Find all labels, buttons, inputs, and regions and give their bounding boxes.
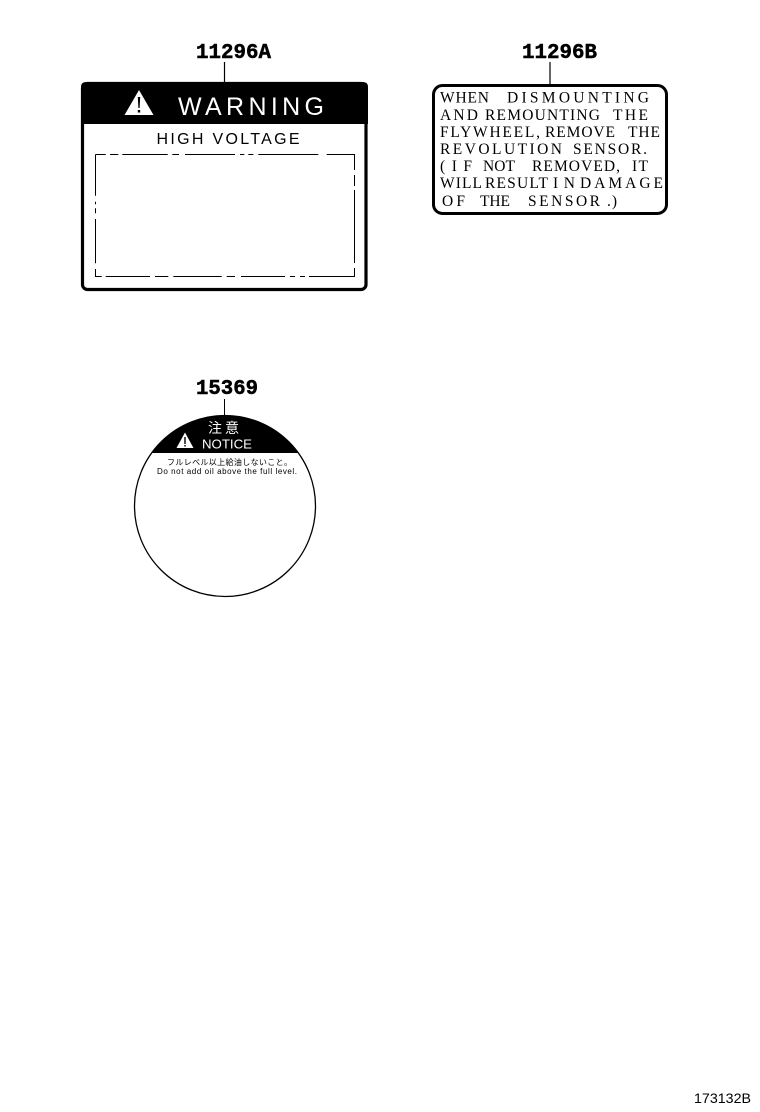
leader line C xyxy=(224,399,226,416)
notice japanese heading: 注意 xyxy=(208,420,239,436)
panel: label 11296A xyxy=(81,42,368,290)
caution text block: SENSOR xyxy=(528,193,601,210)
caution text block: NOT xyxy=(483,158,516,175)
high voltage heading: HIGH VOLTAGE xyxy=(156,131,300,148)
caution label frame xyxy=(434,86,666,214)
part number 15369: 15369 xyxy=(196,378,258,401)
leader line A xyxy=(224,62,226,84)
notice japanese text: フルレベル以上給油しないこと。 xyxy=(167,457,292,467)
caution text block: WHEN xyxy=(440,90,489,106)
part number 11296B: 11296B xyxy=(522,42,597,65)
notice circle outline xyxy=(134,416,316,596)
notice heading: NOTICE xyxy=(202,436,252,452)
caution text block: (IF xyxy=(440,158,472,175)
caution text block: .) xyxy=(607,193,617,210)
warning black header xyxy=(81,82,368,124)
caution text block: THE xyxy=(628,124,660,141)
caution text block: REMOUNTING xyxy=(485,107,600,124)
caution text block: REMOVED, xyxy=(532,158,620,175)
caution text block: OF xyxy=(442,193,465,210)
figure reference number: 173132B xyxy=(694,1091,751,1106)
panel: label 15369 xyxy=(134,378,316,596)
caution text block: DISMOUNTING xyxy=(507,90,649,106)
notice english text: Do not add oil above the full level. xyxy=(157,467,297,476)
caution text block: RESULT xyxy=(485,175,549,192)
caution text block: FLYWHEEL, xyxy=(440,124,540,141)
caution text block xyxy=(440,90,663,210)
part number 11296A: 11296A xyxy=(196,42,271,65)
warning heading: WARNING xyxy=(178,93,324,121)
warning label frame xyxy=(82,84,366,290)
leader line B xyxy=(549,62,551,85)
caution text block: REMOVE xyxy=(545,124,615,141)
caution text block: WILL xyxy=(440,175,482,192)
panel: label 11296B xyxy=(434,42,666,214)
notice black cap xyxy=(152,415,298,453)
caution text block: DAMAGE xyxy=(580,175,663,192)
caution text block: IT xyxy=(632,158,649,175)
caution text block: IN xyxy=(553,175,575,192)
icon: notice triangle xyxy=(176,432,194,448)
dashed sticker outline xyxy=(96,154,354,276)
caution text block: AND xyxy=(440,107,478,124)
caution text block: SENSOR. xyxy=(573,141,647,158)
caution text block: REVOLUTION xyxy=(440,141,562,158)
caution text block: THE xyxy=(613,107,648,124)
icon: warning triangle xyxy=(124,90,154,115)
caution text block: THE xyxy=(480,193,510,210)
